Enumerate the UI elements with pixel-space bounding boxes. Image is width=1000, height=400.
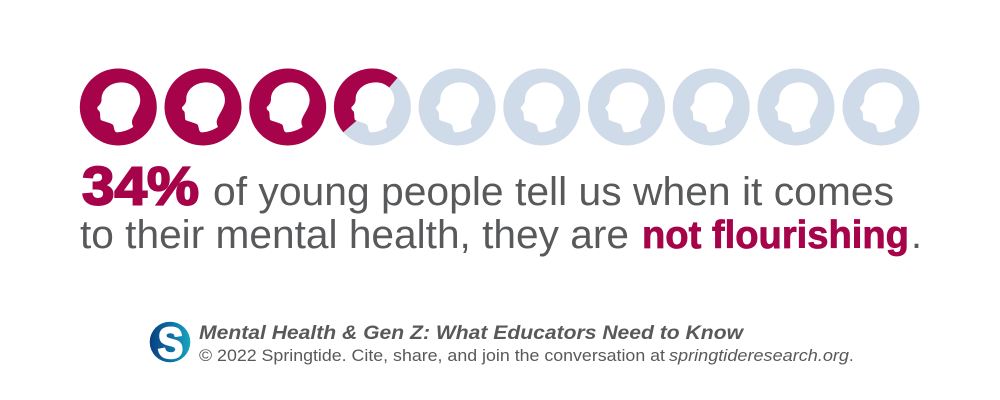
emphasis: not flourishing: not flourishing: [642, 214, 909, 257]
footer citation: [199, 347, 854, 365]
citation text: © 2022 Springtide. Cite, share, and join the conversation at: [199, 347, 665, 365]
icon row: ten head circles: [80, 68, 920, 146]
icon: head 5 empty: [419, 68, 496, 146]
icon: head 2 filled: [164, 68, 242, 146]
icon: head 6 empty: [503, 68, 580, 146]
icon: head 9 empty: [758, 68, 834, 146]
headline statement: [80, 156, 922, 257]
headline line 1: of young people tell us when it comes: [213, 170, 894, 214]
headline line 2: to their mental health, they are: [80, 213, 629, 257]
icon: head 8 empty: [673, 68, 750, 146]
logo: Springtide S badge: S: [158, 320, 183, 368]
icon: head 3 filled: [249, 68, 326, 146]
citation url: springtideresearch.org: [669, 347, 850, 365]
citation period: .: [849, 347, 854, 365]
big stat: 34%: 34%: [82, 156, 199, 216]
headline period: .: [911, 213, 922, 257]
icon: head 10 empty: [842, 68, 920, 146]
icon: head 4 partly filled: [334, 68, 411, 146]
icon: head 7 empty: [588, 68, 665, 146]
footer source title: Mental Health & Gen Z: What Educators Need to Know: [199, 323, 744, 344]
icon: head 1 filled: [80, 68, 157, 146]
